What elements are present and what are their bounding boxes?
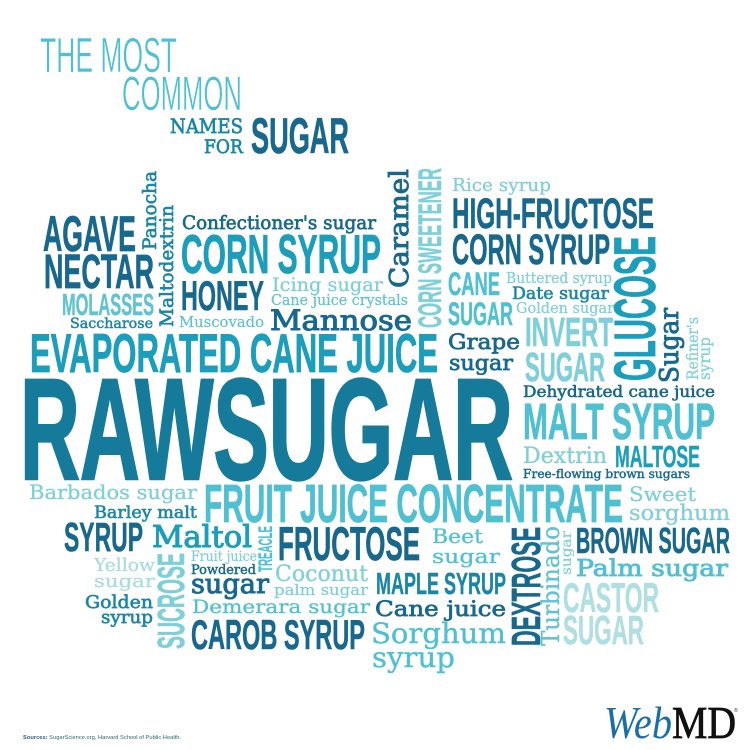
word cloud: lower left: Golden: [85, 592, 153, 613]
word cloud: lower left: FRUCTOSE: [278, 517, 420, 570]
word cloud: lower right: sorghum: [629, 501, 730, 525]
word cloud: upper right: Refiner's: [683, 317, 702, 380]
word cloud: upper left: NECTAR: [44, 246, 154, 299]
word cloud: upper left: Confectioner's sugar: [182, 212, 377, 234]
word cloud: lower left: SYRUP: [64, 514, 143, 560]
word cloud: lower left: Demerara sugar: [192, 596, 371, 618]
word cloud: lower right: DEXTROSE: [503, 527, 549, 646]
word cloud: lower left: CAROB SYRUP: [191, 611, 365, 658]
word cloud: lower right: MAPLE SYRUP: [376, 566, 506, 601]
word cloud: lower left: Barbados sugar: [29, 480, 197, 504]
word cloud: lower left: palm sugar: [274, 581, 369, 599]
word cloud: lower left: sugar: [94, 571, 155, 592]
word cloud: upper left: Icing sugar: [272, 274, 384, 296]
word cloud: upper right: GLUCOSE: [603, 236, 668, 381]
word cloud: lower right: Sweet: [629, 482, 696, 506]
title: SUGAR: [251, 108, 349, 164]
logo: WebMD: MD: [672, 697, 736, 748]
title: COMMON: [122, 68, 242, 121]
word cloud: upper right: SUGAR: [525, 344, 605, 390]
word cloud: upper right: Grape: [448, 330, 520, 354]
word cloud: upper left: Muscovado: [179, 313, 264, 331]
word cloud: upper left: EVAPORATED CANE JUICE: [30, 322, 438, 384]
word cloud: upper right: Date sugar: [512, 284, 610, 304]
word cloud: upper right: SUGAR: [448, 296, 513, 332]
title: NAMES: [170, 114, 243, 138]
word cloud: lower left: Barley malt: [94, 503, 197, 523]
word cloud: upper left: MOLASSES: [62, 287, 154, 322]
word cloud: upper left: Panocha: [139, 171, 161, 250]
word cloud: lower right: SUGAR: [563, 607, 644, 653]
word cloud: upper right: Buttered syrup: [506, 269, 612, 287]
word cloud: upper right: Rice syrup: [452, 175, 551, 196]
word cloud: upper left: Cane juice crystals: [271, 291, 408, 309]
word cloud: lower left: sugar: [191, 569, 269, 600]
word cloud: lower right: Cane juice: [375, 597, 506, 621]
word cloud: upper left: Mannose: [270, 304, 412, 337]
word cloud: middle right: Free-flowing brown sugars: [523, 467, 690, 481]
word cloud: upper left: CORN SYRUP: [181, 223, 381, 285]
word cloud: lower left: syrup: [101, 607, 153, 628]
word cloud: upper right: CORN SWEETENER: [412, 168, 448, 328]
word cloud: lower left: SUCROSE: [151, 553, 193, 649]
word cloud: upper right: CANE: [448, 266, 500, 302]
word cloud: upper left: HONEY: [181, 272, 264, 319]
word cloud: upper left: [30, 171, 438, 384]
word cloud: lower right: Palm sugar: [576, 556, 728, 582]
word cloud: upper left: AGAVE: [43, 206, 136, 262]
word cloud: upper right: Sugar: [655, 307, 685, 383]
word cloud: lower left: Maltol: [152, 520, 252, 555]
title: THE MOST: [40, 29, 177, 83]
word cloud: lower right: CASTOR: [563, 574, 659, 621]
title: FOR: [204, 136, 244, 158]
word cloud: lower right: syrup: [372, 641, 455, 674]
word cloud: lower left: Yellow: [93, 555, 156, 576]
word cloud: upper right: Golden sugar: [516, 299, 615, 317]
word cloud: lower right: Beet: [432, 524, 483, 548]
word cloud: lower right: Turbinado: [537, 526, 565, 646]
word cloud: upper left: Saccharose: [70, 316, 153, 332]
word cloud: upper right: Caramel: [385, 169, 415, 288]
word cloud: middle right: Dextrin: [523, 444, 607, 469]
word cloud: upper right: sugar: [449, 351, 514, 375]
word cloud: lower left: [29, 474, 623, 658]
word cloud: upper right: [385, 168, 714, 390]
word cloud: lower right: Sorghum: [371, 617, 506, 650]
word cloud: lower left: Coconut: [275, 562, 368, 587]
word cloud: upper right: syrup: [695, 337, 714, 380]
word cloud: lower left: Fruit juice: [191, 549, 257, 565]
word cloud: lower right: sugar: [432, 544, 501, 568]
logo: WebMD: [604, 697, 738, 748]
word cloud: lower left: TREACLE: [256, 526, 277, 572]
word cloud: upper right: INVERT: [525, 309, 613, 355]
word cloud: upper right: CORN SYRUP: [452, 226, 610, 274]
word cloud: lower right: sugar: [559, 531, 575, 575]
word cloud: upper left: Maltodextrin: [156, 205, 178, 327]
logo: WebMD: ®: [734, 707, 738, 714]
sources note: Sources: SugarScience.org, Harvard School of Public Health.: [23, 735, 181, 741]
word cloud: lower left: Powdered: [191, 563, 256, 578]
logo: WebMD: Web: [604, 697, 672, 748]
word cloud: middle right: [523, 382, 715, 481]
word cloud: lower right: [371, 482, 730, 674]
title: [40, 29, 349, 164]
word cloud: middle right: Dehydrated cane juice: [523, 382, 715, 401]
